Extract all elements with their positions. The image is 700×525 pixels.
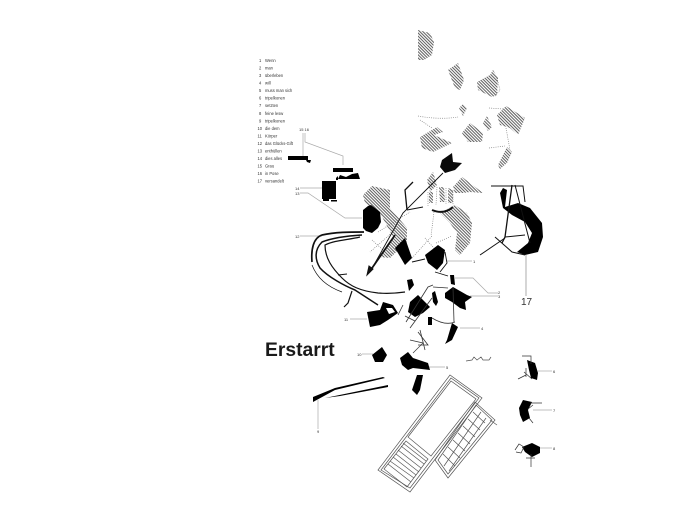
legend: numbered word list: 6 [259,96,262,101]
signature squiggle [466,357,491,361]
legend: numbered word list: 13 [258,148,263,154]
tweezers 9 [313,377,388,402]
hatched figure, right [427,172,483,255]
infographic canvas: 3 [498,294,501,299]
legend: numbered word list: 9 [259,118,262,123]
blob 5 [400,340,430,370]
legend: numbered word list: überleben [265,73,284,78]
blob 11 [367,302,398,327]
figure 7 [519,400,542,423]
infographic canvas: 2 [498,290,501,295]
blob 12 with wires [312,205,405,307]
infographic canvas: 9 [317,429,320,434]
legend: numbered word list: Wenn [265,58,276,63]
legend: numbered word list: 3 [259,73,262,78]
blob with loop, label 1 [412,245,448,276]
legend: numbered word list: 11 [258,133,262,138]
dark sliver below blob 5 [412,375,423,395]
blob 4 [445,323,458,344]
infographic canvas: 8 [553,446,556,451]
legend: numbered word list: 8 [259,111,262,116]
hatched figure, left [363,186,407,258]
black bars near labels 15 and 16 [288,156,360,180]
infographic canvas: 7 [553,408,556,413]
title: Erstarrt [265,340,335,361]
legend: numbered word list: 12 [258,141,263,146]
legend: numbered word list: 14 [258,156,263,161]
legend: numbered word list [258,58,294,184]
legend: numbered word list: dies alles [265,156,282,161]
legend: numbered word list: Körper [265,133,278,138]
legend: numbered word list: enthüllen [265,148,282,154]
label 17: 17 [521,297,533,308]
hatched figure fragments, upper [418,30,525,169]
legend: numbered word list: feine lesw [265,111,283,116]
vehicle grid, main body [378,375,482,492]
legend: numbered word list: 17 [258,179,263,184]
figure 8 [515,443,540,467]
legend: numbered word list: 1 [259,58,262,63]
legend: numbered word list: 16 [258,171,263,176]
black block, labels 13 and 14 [322,181,337,202]
infographic canvas: 15 16 [299,127,310,132]
legend: numbered word list: muss man sich [265,88,293,93]
infographic canvas: 6 [553,369,556,374]
legend: numbered word list: die dem [265,126,280,131]
legend: numbered word list: in Pose [265,171,279,176]
legend: numbered word list: 7 [259,103,262,108]
legend: numbered word list: versandelt [265,179,285,184]
vehicle grid, side panel [435,402,497,478]
dotted contour lines [370,78,510,258]
infographic canvas: 10 [357,352,362,357]
infographic canvas: 11 [344,317,349,322]
star-shaped ink blot [440,153,462,173]
legend: numbered word list: das Glücks-Gift [265,141,294,146]
legend: numbered word list: 4 [259,81,262,86]
legend: numbered word list: tripelkonen [265,118,286,123]
legend: numbered word list: will [265,81,271,86]
infographic canvas: 14 [295,186,300,191]
legend: numbered word list: man [265,66,274,70]
legend: numbered word list: Grau [265,164,274,169]
legend: numbered word list: 2 [259,66,262,70]
infographic canvas: 5 [446,365,449,370]
infographic canvas: 4 [481,326,484,331]
legend: numbered word list: 5 [259,88,262,93]
infographic canvas: 1 [473,259,476,264]
figure 17 [480,185,543,255]
dark knot with wire on right figure [432,207,453,212]
dark parallogram [395,238,412,265]
infographic canvas: 12 [295,234,300,239]
legend: numbered word list: 10 [258,126,263,131]
central tangle of ink [398,275,472,350]
legend: numbered word list: tripelkonen [265,96,286,101]
legend: numbered word list: setzten [265,103,279,108]
legend: numbered word list: 15 [258,164,263,169]
figure 6 [518,356,538,380]
arrow with branch [367,173,443,275]
label lines and numbers [300,133,552,448]
infographic canvas: 13 [295,191,300,196]
blob 10 [372,347,387,362]
